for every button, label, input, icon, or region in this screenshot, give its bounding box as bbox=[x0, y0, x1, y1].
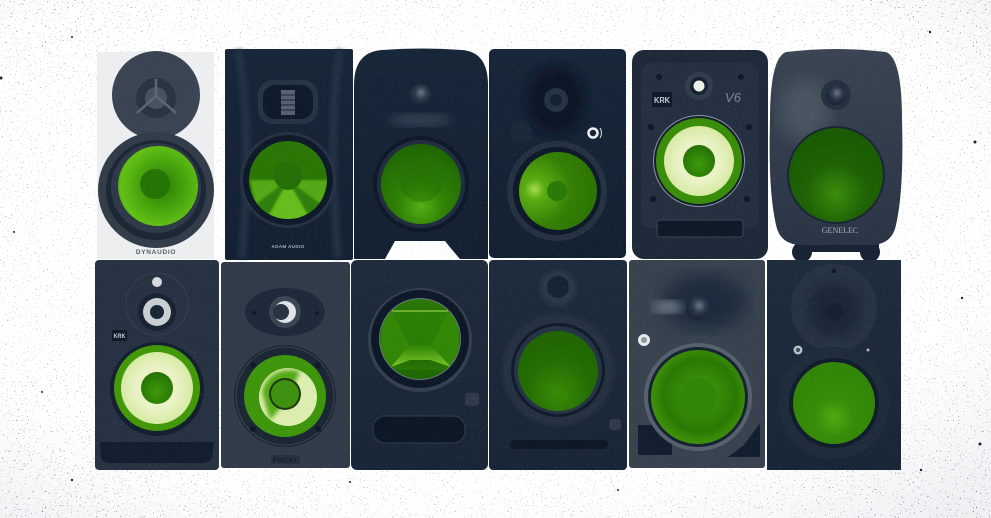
ribbon tweeter bbox=[258, 80, 318, 124]
KRK badge: KRK bbox=[114, 334, 126, 340]
cabinet bbox=[489, 260, 627, 470]
cabinet bbox=[221, 262, 350, 468]
lower ports bbox=[638, 423, 760, 457]
tweeter oval bbox=[245, 288, 325, 336]
speaker: white Dynaudio monitor bbox=[97, 51, 214, 259]
brand label bbox=[271, 455, 300, 464]
cabinet bbox=[354, 48, 488, 259]
bass port bbox=[100, 442, 214, 463]
bass port bbox=[373, 416, 465, 443]
mounting screws bbox=[648, 74, 752, 202]
speaker: Genelec monitor bbox=[770, 49, 902, 262]
woofer bbox=[653, 115, 745, 207]
tweeter plate bbox=[112, 51, 200, 139]
brand label: DYNAUDIO bbox=[136, 249, 176, 256]
woofer bbox=[234, 345, 336, 447]
cabinet bbox=[767, 260, 901, 470]
tweeter and mid dome bbox=[126, 273, 188, 335]
woofer bbox=[787, 126, 885, 224]
tweeter bbox=[821, 80, 851, 110]
logo bbox=[638, 334, 650, 346]
film grain over speakers bbox=[95, 48, 903, 471]
tweeter bbox=[685, 72, 713, 100]
brand label: GENELEC bbox=[822, 226, 858, 235]
slot port bbox=[510, 440, 608, 449]
woofer bbox=[240, 132, 336, 228]
woofer bbox=[778, 347, 890, 459]
speaker: dark monitor with slot port bbox=[489, 260, 627, 470]
woofer bbox=[507, 141, 607, 241]
speaker: Adam Audio monitor bbox=[225, 49, 353, 260]
tweeter bbox=[540, 270, 576, 306]
ring logo bbox=[588, 128, 602, 138]
horn driver bbox=[368, 288, 472, 392]
speaker: Mackie MR-style monitor bbox=[767, 260, 901, 470]
brand label: FOCAL bbox=[272, 458, 299, 464]
KRK badge bbox=[112, 330, 127, 341]
woofer bbox=[110, 342, 204, 436]
woofer bbox=[98, 132, 214, 248]
cabinet bbox=[770, 49, 902, 245]
cabinet bbox=[97, 52, 214, 259]
waveguide and tweeter bbox=[526, 66, 586, 134]
bass port bbox=[657, 220, 743, 237]
waveguide bbox=[653, 274, 747, 330]
brand label: ADAM AUDIO bbox=[271, 244, 305, 249]
status light bbox=[609, 419, 621, 430]
KRK badge: KRK bbox=[654, 96, 670, 105]
logo bbox=[794, 346, 870, 354]
cabinet bbox=[95, 260, 219, 470]
speaker: rounded black monitor with feet bbox=[354, 48, 488, 259]
waveguide and tweeter bbox=[791, 264, 877, 352]
speaker: Neumann monitor bbox=[629, 260, 765, 468]
speaker: KRK Rokit three-way monitor bbox=[95, 260, 219, 470]
V6 mark: V6 bbox=[725, 90, 742, 105]
feet bbox=[792, 242, 880, 262]
cabinet bbox=[632, 50, 768, 259]
speaker: KRK V-series monitor bbox=[632, 50, 768, 259]
cabinet bbox=[225, 49, 353, 260]
woofer bbox=[644, 343, 752, 451]
cabinet bbox=[351, 260, 488, 470]
woofer bbox=[502, 314, 614, 426]
tweeter bbox=[409, 84, 431, 106]
speaker: Mackie-style monitor with ring logo bbox=[489, 49, 626, 258]
recessed port bbox=[510, 121, 532, 143]
speaker: Focal monitor bbox=[221, 262, 350, 468]
KRK badge bbox=[652, 92, 672, 107]
cabinet bbox=[629, 260, 765, 468]
woofer bbox=[373, 136, 469, 232]
status light bbox=[465, 393, 479, 406]
speaker: horn-loaded monitor bbox=[351, 260, 488, 470]
cabinet bbox=[489, 49, 626, 258]
